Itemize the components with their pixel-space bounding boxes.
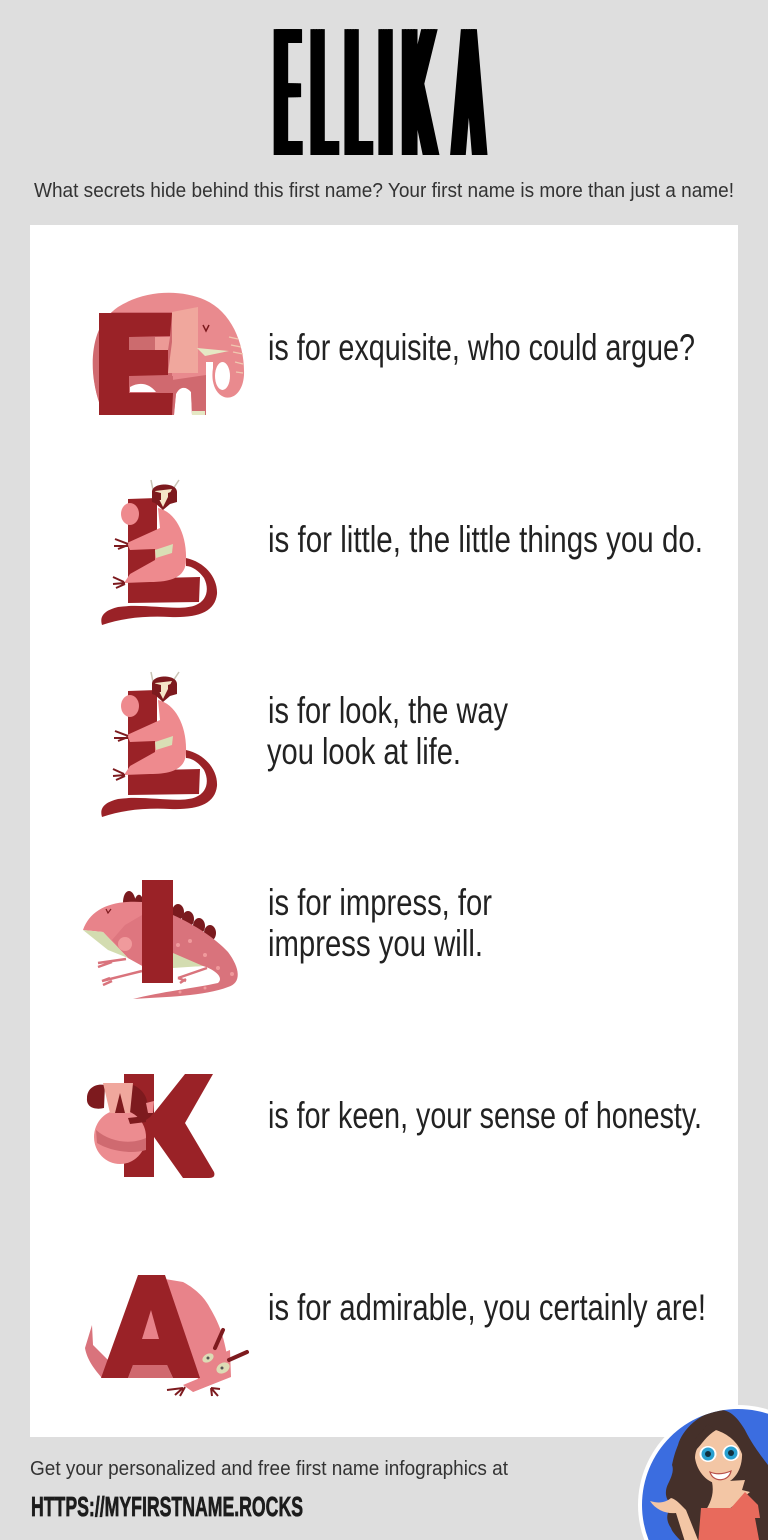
- text: letter I lines: impress you will.: [268, 923, 483, 964]
- footer text: Get your personalized and free first name infographics at: [30, 1458, 508, 1480]
- subtitle: What secrets hide behind this first name? Your first name is more than just a name!: [34, 180, 734, 202]
- icon: monkey letter L: [101, 480, 217, 625]
- icon: elephant letter E: [93, 293, 244, 415]
- icon: monkey letter L second: [101, 672, 217, 817]
- icon: armadillo letter A: [85, 1275, 247, 1396]
- text: letter I lines: [268, 882, 492, 964]
- text: second letter L lines: [267, 690, 508, 772]
- text: second letter L lines: you look at life.: [267, 731, 461, 772]
- footer url: HTTPS://MYFIRSTNAME.ROCKS: [31, 1491, 303, 1522]
- title: [271, 0, 488, 194]
- icon: koala letter K: [87, 1074, 214, 1178]
- avatar: [638, 1405, 768, 1540]
- text: letter I lines: is for impress, for: [268, 882, 492, 923]
- text: second letter L lines: is for look, the way: [268, 690, 508, 731]
- panel: letters: [30, 225, 738, 1437]
- icon: lizard letter I: [83, 880, 238, 999]
